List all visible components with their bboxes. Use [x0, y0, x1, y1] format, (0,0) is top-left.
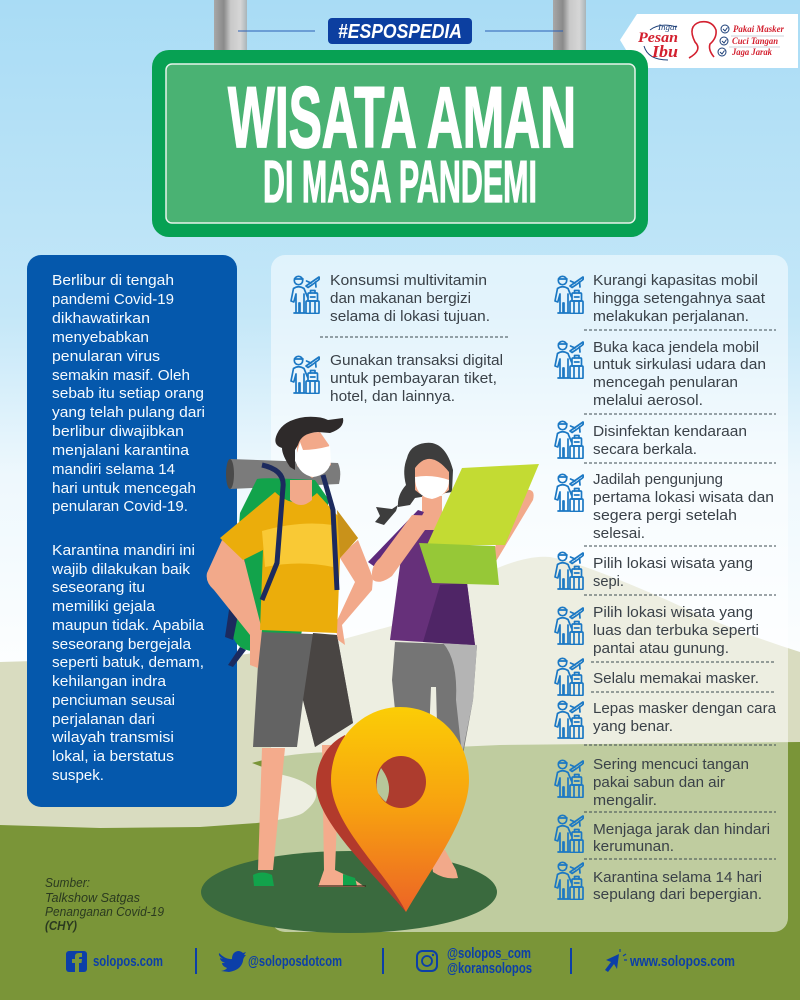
tip: quiet location — [555, 552, 753, 590]
tip: open location — [555, 604, 759, 657]
tip: open location: luas dan terbuka seperti — [593, 622, 759, 639]
tip: open location: pantai atau gunung. — [593, 640, 729, 657]
panel: intro text: Karantina mandiri ini — [52, 542, 195, 559]
tip: wash hands: mengalir. — [593, 792, 657, 809]
source note: Sumber: — [45, 876, 90, 890]
title sign: DI MASA PANDEMI — [263, 149, 537, 215]
title sign — [152, 50, 648, 237]
panel: intro text: penularan virus — [52, 348, 160, 365]
tip: vitamins: dan makanan bergizi — [330, 290, 471, 307]
tip: wear mask — [555, 658, 759, 696]
tip: vitamins: Konsumsi multivitamin — [330, 272, 487, 289]
tip: remove mask: Lepas masker dengan cara — [593, 700, 777, 717]
tip: car windows: untuk sirkulasi udara dan — [593, 356, 766, 373]
tip: quiet location: Pilih lokasi wisata yang — [593, 555, 753, 572]
tip: digital payment — [291, 352, 503, 405]
tip: car capacity — [555, 272, 766, 325]
tip: car capacity: hingga setengahnya saat — [593, 290, 766, 307]
background sky — [0, 0, 800, 700]
tip: car windows: mencegah penularan — [593, 374, 738, 391]
panel: intro text: seseorang itu — [52, 579, 145, 596]
tip: first visitor: Jadilah pengunjung — [593, 471, 723, 488]
tip: quarantine: Karantina selama 14 hari — [593, 869, 762, 886]
source note: (CHY) — [45, 919, 77, 933]
campaign logo: Cuci Tangan — [732, 37, 778, 47]
tip: digital payment: untuk pembayaran tiket, — [330, 370, 497, 387]
panel: intro text: sebab itu setiap orang — [52, 385, 204, 402]
tip: remove mask — [555, 700, 777, 738]
tip: car capacity: Kurangi kapasitas mobil — [593, 272, 758, 289]
tip: first visitor: segera pergi setelah — [593, 507, 737, 524]
tip: quarantine: sepulang dari bepergian. — [593, 886, 762, 903]
background hills — [0, 557, 800, 850]
tip: wash hands — [555, 756, 749, 809]
tip: keep distance — [555, 815, 770, 855]
illustration: woman — [368, 443, 539, 878]
footer: instagram — [417, 945, 532, 977]
tip: quiet location: sepi. — [593, 573, 624, 590]
background ground — [0, 742, 800, 1000]
panel: intro text: yang telah pulang dari — [52, 404, 205, 421]
tip: vitamins — [291, 272, 490, 325]
panel: intro text — [27, 255, 237, 807]
tip: remove mask: yang benar. — [593, 718, 673, 735]
panel: intro text: Berlibur di tengah — [52, 272, 174, 289]
panel: intro text: wilayah transmisi — [51, 729, 174, 746]
footer: instagram: @koransolopos — [447, 960, 532, 977]
tip: car windows — [555, 339, 766, 409]
tip: car windows: Buka kaca jendela mobil — [593, 339, 759, 356]
panel: intro text: seseorang bergejala — [52, 636, 192, 653]
tip: first visitor: pertama lokasi wisata dan — [593, 489, 774, 506]
footer: website — [605, 949, 735, 972]
sign posts — [214, 0, 586, 52]
tip: disinfect: secara berkala. — [593, 441, 697, 458]
tip: car windows: melalui aerosol. — [593, 392, 703, 409]
panel: intro text: hari untuk mencegah — [52, 480, 196, 497]
panel: intro text: menjalani karantina — [52, 442, 190, 459]
illustration: man — [207, 417, 373, 887]
tip: car capacity: melakukan perjalanan. — [593, 308, 749, 325]
footer: twitter — [219, 951, 342, 972]
footer: facebook: solopos.com — [93, 953, 163, 970]
panel: intro text: menyebabkan — [52, 329, 149, 346]
footer: facebook — [66, 951, 163, 972]
panel: intro text: seperti batuk, demam, — [52, 654, 204, 671]
campaign logo: Pesan — [638, 30, 678, 46]
ground shadow ellipse — [201, 851, 497, 933]
panel: intro text: kehilangan indra — [52, 673, 167, 690]
panel: intro text: suspek. — [52, 767, 104, 784]
tip: first visitor — [555, 471, 774, 542]
panel: intro text: semakin masif. Oleh — [52, 367, 190, 384]
panel: intro text: mandiri selama 14 — [52, 461, 175, 478]
tip: disinfect — [555, 421, 747, 458]
panel: intro text: penciuman seusai — [52, 692, 175, 709]
source note: Talkshow Satgas — [45, 891, 140, 905]
campaign logo — [620, 14, 798, 68]
tip: disinfect: Disinfektan kendaraan — [593, 423, 747, 440]
hashtag badge: #ESPOSPEDIA — [338, 21, 462, 43]
location pin — [316, 707, 469, 912]
tip: open location: Pilih lokasi wisata yang — [593, 604, 753, 621]
campaign logo: Ibu — [651, 42, 678, 61]
panel: intro text: perjalanan dari — [52, 711, 155, 728]
panel: intro text: lokal, ia berstatus — [52, 748, 174, 765]
tip: keep distance: Menjaga jarak dan hindari — [593, 821, 770, 838]
panel: intro text: wajib dilakukan baik — [51, 561, 191, 578]
panel: intro text: maupun tidak. Apabila — [52, 617, 205, 634]
tip: vitamins: selama di lokasi tujuan. — [330, 308, 490, 325]
panel: tips background — [271, 255, 788, 932]
tip: wash hands: pakai sabun dan air — [593, 774, 725, 791]
panel: intro text: memiliki gejala — [52, 598, 156, 615]
tip: digital payment: hotel, dan lainnya. — [330, 388, 455, 405]
source note — [45, 876, 164, 933]
footer: twitter: @soloposdotcom — [248, 953, 342, 970]
campaign logo: Pakai Masker — [733, 25, 784, 35]
hashtag badge — [238, 18, 563, 44]
source note: Penanganan Covid-19 — [45, 905, 164, 919]
tip: first visitor: selesai. — [593, 525, 645, 542]
panel: intro text: dikhawatirkan — [52, 310, 150, 327]
footer: instagram: @solopos_com — [447, 945, 531, 962]
tip: quarantine — [555, 862, 762, 903]
campaign logo: Ingat — [657, 22, 678, 32]
footer: website: www.solopos.com — [629, 953, 735, 970]
campaign logo: Jaga Jarak — [731, 48, 772, 58]
tip: wear mask: Selalu memakai masker. — [593, 670, 759, 687]
panel: intro text: pandemi Covid-19 — [52, 291, 174, 308]
panel: intro text: berlibur diwajibkan — [52, 423, 184, 440]
panel: intro text: penularan Covid-19. — [52, 498, 188, 515]
tip: keep distance: kerumunan. — [593, 838, 674, 855]
tip: wash hands: Sering mencuci tangan — [593, 756, 749, 773]
tip: digital payment: Gunakan transaksi digital — [330, 352, 503, 369]
